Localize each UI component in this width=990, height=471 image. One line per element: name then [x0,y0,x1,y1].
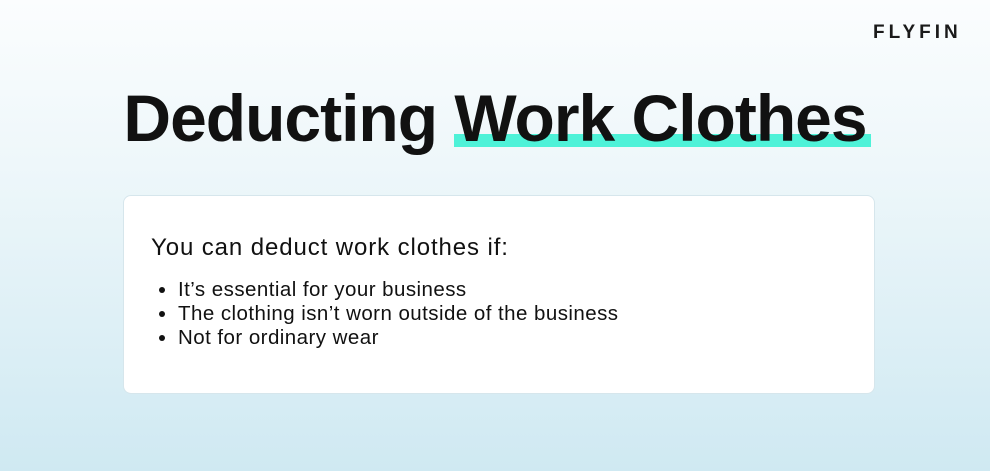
logo: FLYFIN [873,22,962,43]
title [123,81,871,155]
bullet list: Not for ordinary wear [178,326,379,349]
card heading: You can deduct work clothes if: [151,234,509,261]
panel: conditions card [123,195,875,394]
title: Deducting [123,81,437,155]
bullet list: The clothing isn’t worn outside of the business [178,302,618,325]
title: Work Clothes [454,81,867,155]
bullet list: It’s essential for your business [178,278,467,301]
bullet list [159,278,618,349]
